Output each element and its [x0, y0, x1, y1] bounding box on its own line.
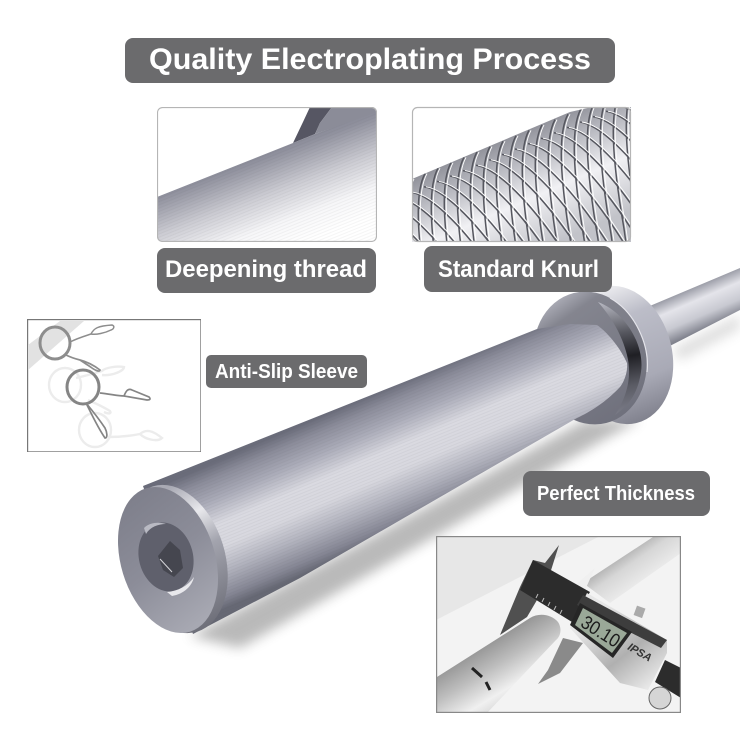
- thumb wheels: [634, 606, 671, 709]
- caliper rear jaw: [500, 545, 559, 635]
- main barbell sleeve: [101, 268, 740, 648]
- ghost clips: [49, 367, 162, 447]
- panel: standard knurl photo: [412, 106, 632, 242]
- spring clip upper: [40, 325, 114, 371]
- sleeve end chamfer: [105, 472, 245, 646]
- upper fixed jaw: [583, 578, 590, 586]
- label: standard knurl: [424, 246, 612, 292]
- lower bar knurled segment: [437, 615, 560, 713]
- caliper body: [570, 593, 667, 690]
- title: Quality Electroplating Process: [149, 43, 591, 76]
- shaft shadow: [672, 315, 740, 360]
- panel: caliper measuring photo: [436, 536, 681, 713]
- bar shaft: [645, 268, 740, 350]
- digital display: [570, 603, 632, 658]
- label: perfect thickness: Perfect Thickness: [537, 483, 695, 505]
- bar behind clip: [28, 321, 84, 370]
- label: standard knurl: Standard Knurl: [438, 256, 599, 283]
- digital display: 30.10: [577, 612, 624, 652]
- label: anti-slip sleeve: Anti-Slip Sleeve: [215, 361, 358, 383]
- panel: spring clips photo: [28, 320, 201, 452]
- spring clip lower: [67, 370, 150, 438]
- bar far segment: [583, 537, 681, 603]
- caliper brand mark: IPSA: [625, 641, 654, 665]
- collar outer cylinder: [553, 274, 687, 436]
- label: deepening thread: [157, 248, 376, 293]
- sleeve body: [143, 324, 627, 634]
- label: anti-slip sleeve: [206, 355, 367, 388]
- caliper lower jaw: [538, 638, 583, 684]
- title: [125, 38, 615, 83]
- panel: deepening thread photo: [157, 107, 377, 242]
- caliper beam: [520, 560, 681, 698]
- sleeve end face: [101, 475, 235, 645]
- label: perfect thickness: [523, 471, 710, 516]
- sleeve shadow: [190, 420, 640, 648]
- hex socket: [131, 516, 201, 598]
- label: deepening thread: Deepening thread: [165, 256, 367, 283]
- collar front disc: [519, 279, 661, 437]
